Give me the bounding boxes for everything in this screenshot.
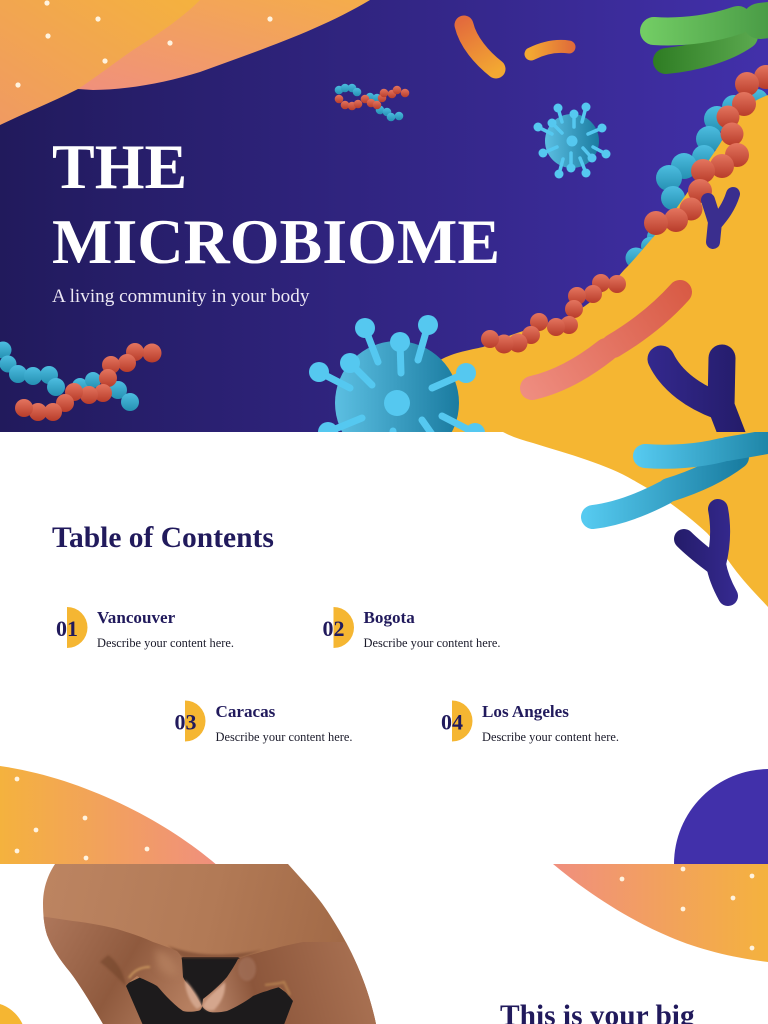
item 04: Describe your content here. (482, 730, 619, 744)
right hand (202, 942, 385, 1024)
big virus (309, 315, 485, 432)
small mixed chain (335, 84, 409, 121)
black fabric (124, 957, 296, 1024)
belly lower shadow (168, 946, 262, 958)
item 02: Bogota (364, 608, 415, 627)
orange bacterium long (464, 25, 496, 69)
item 02 (322, 607, 500, 650)
right thumb tip (203, 982, 225, 1010)
red bacteria chain, lower (481, 274, 626, 354)
yellow body shape (440, 95, 768, 432)
yellow corner shape (503, 432, 768, 607)
bottom left blob (0, 766, 218, 866)
item 01: Vancouver (97, 608, 176, 627)
upper blue bacterium (645, 436, 768, 457)
item 03: Caracas (216, 702, 276, 721)
panel: big idea slide (0, 864, 768, 1024)
blue bacteria chain, right, behind the yellow shape (626, 89, 768, 268)
right knuckle (238, 957, 256, 981)
title second line: MICROBIOME (52, 206, 500, 277)
yellow shape bottom left (0, 1002, 26, 1024)
large antibody (661, 358, 738, 450)
item 01: Describe your content here. (97, 636, 234, 650)
red bacteria chain, upper right (644, 65, 768, 235)
subtitle: A living community in your body (52, 286, 310, 307)
small antibody (708, 194, 733, 242)
item 01 (56, 607, 234, 650)
item 02: 02 (322, 616, 344, 641)
panel: title slide (0, 0, 768, 465)
green bacteria (654, 17, 768, 61)
lower blue bacterium (593, 457, 737, 517)
orange bacterium short (531, 46, 569, 54)
left thumb highlight (155, 950, 178, 976)
belly skin (40, 864, 380, 1024)
top left blob (0, 0, 370, 125)
item 01: 01 (56, 616, 78, 641)
salmon bacterium (532, 292, 680, 388)
item 03: 03 (174, 710, 196, 734)
left thumb nail (185, 980, 202, 1009)
item 04: 04 (441, 710, 463, 734)
heading: Table of Contents (52, 522, 274, 554)
purple semicircle (674, 769, 768, 864)
slide background (0, 0, 768, 432)
slide background (0, 432, 768, 864)
left bacteria chains (0, 342, 162, 421)
panel: table of contents slide (0, 432, 768, 864)
left hand (40, 916, 202, 1024)
title: THE (52, 131, 187, 202)
item 03 (174, 700, 352, 744)
antibody (684, 509, 728, 596)
photo: hands on belly (40, 864, 385, 1024)
item 03: Describe your content here. (216, 730, 352, 744)
top right blob (553, 864, 768, 962)
left knuckle crease (129, 967, 150, 978)
small virus (534, 102, 610, 178)
left hand inner shadow (100, 955, 126, 986)
item 04: Los Angeles (482, 702, 569, 721)
item 04 (441, 700, 619, 744)
item 02: Describe your content here. (364, 636, 500, 650)
right hand fold (265, 982, 290, 995)
